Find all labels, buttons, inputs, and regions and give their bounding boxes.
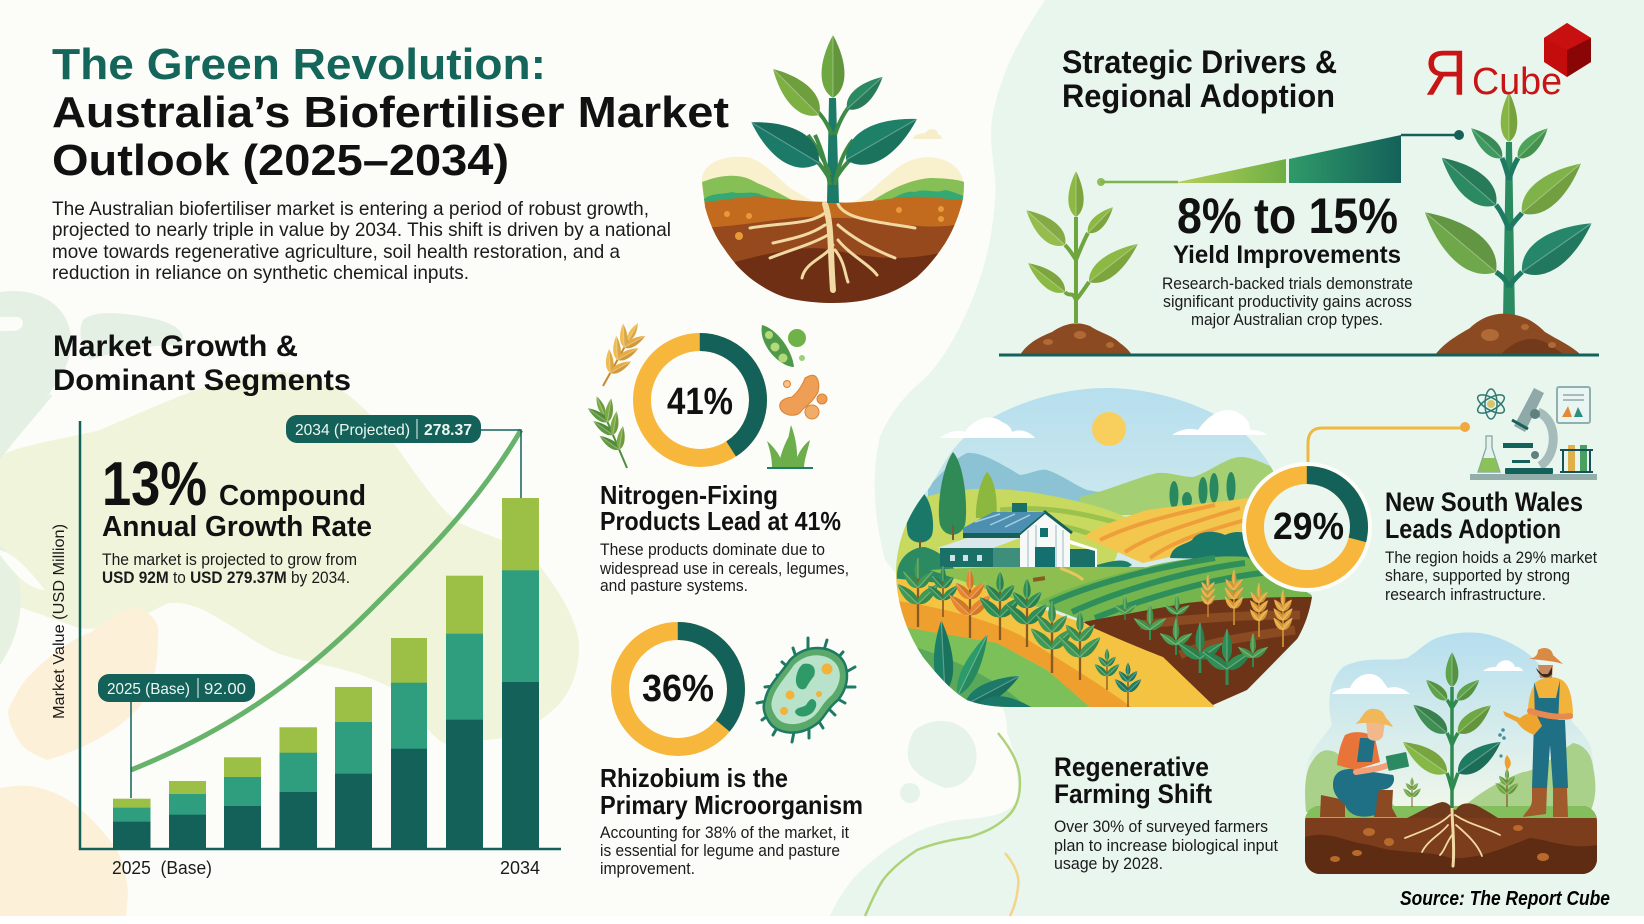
text: rhizobium: Accounting for 38% of the market, it [600, 823, 849, 842]
stat: 13% CAGR: USD 92M to USD 279.37M by 2034. [102, 568, 350, 587]
stat: yield improvements: Yield Improvements [1173, 241, 1401, 269]
intro text: move towards regenerative agriculture, soil health restoration, and a [52, 241, 620, 263]
donut: 41% nitrogen-fixing: 41% [667, 381, 733, 423]
central plant [1397, 652, 1507, 808]
stat: 13% CAGR: Annual Growth Rate [102, 511, 372, 543]
intro text: projected to nearly triple in value by 2034. This shift is driven by a national [52, 219, 671, 241]
icon: peas [762, 325, 806, 367]
text: rhizobium [600, 763, 863, 878]
logo: RCube: Cube [1472, 61, 1562, 103]
heading: market growth [53, 330, 351, 397]
text: new south wales: share, supported by strong [1385, 566, 1570, 585]
stat: yield improvements: Research-backed trials demonstrate [1162, 274, 1413, 293]
x axis labels [112, 858, 540, 878]
text: nitrogen-fixing: Products Lead at 41% [600, 506, 841, 536]
intro text [52, 198, 671, 284]
text: nitrogen-fixing: widespread use in cereals, legumes, [599, 559, 849, 578]
text: nitrogen-fixing: and pasture systems. [600, 576, 748, 595]
x axis labels: 2034 [500, 858, 540, 878]
icon: large plant [1413, 92, 1601, 355]
yellow band [890, 578, 1215, 710]
icon: peanut [780, 375, 827, 419]
donut: 36% rhizobium: 36% [642, 668, 714, 710]
illustration: farm landscape [890, 380, 1320, 720]
farmer standing [1498, 648, 1573, 817]
heading: strategic drivers [1062, 44, 1337, 114]
icon: sun [1092, 412, 1126, 446]
icon: bacterium [757, 638, 855, 742]
callout: 2025 base [98, 674, 255, 798]
donut: 36% rhizobium [620, 631, 736, 747]
source: Source: The Report Cube [1400, 888, 1610, 910]
intro text: The Australian biofertiliser market is entering a period of robust growth, [52, 198, 649, 220]
callout: 2025 base: 92.00 [204, 681, 246, 698]
y axis label: Market Value (USD Million) [51, 524, 68, 719]
logo: RCube: Я [1424, 37, 1467, 109]
text: new south wales: Leads Adoption [1385, 514, 1561, 544]
stat: 13% CAGR [102, 450, 372, 587]
callout: 2034 projected: 2034 (Projected) [295, 422, 410, 439]
donut: 29% new south wales: 29% [1273, 506, 1344, 548]
title: The Green Revolution: [52, 40, 546, 89]
stat: yield improvements: major Australian crop types. [1191, 310, 1383, 329]
text: nitrogen-fixing: Nitrogen-Fixing [600, 480, 778, 510]
bar chart: market value 2025 to 2034 [51, 415, 561, 878]
icon: plant with roots in soil [700, 35, 970, 310]
growth curve [131, 430, 521, 770]
text: regenerative farming: Regenerative [1054, 752, 1209, 782]
text: nitrogen-fixing: These products dominate due to [600, 540, 825, 559]
stat: 13% CAGR: 13% [102, 450, 207, 519]
callout: 2034 projected: 278.37 [424, 422, 472, 439]
text: new south wales: New South Wales [1385, 487, 1583, 517]
icon: research lab [1460, 387, 1597, 480]
illustration: farmers with plant [1305, 632, 1597, 874]
text: new south wales: research infrastructure. [1385, 585, 1546, 604]
green row hill [1037, 556, 1315, 622]
text: rhizobium: is essential for legume and pasture [600, 841, 840, 860]
text: regenerative farming: Farming Shift [1054, 779, 1212, 809]
green bottom-left [908, 628, 1090, 707]
callout: 2034 projected [286, 415, 521, 498]
test tubes [1560, 445, 1593, 473]
stat: yield improvements [1162, 188, 1413, 329]
microscope [1503, 388, 1553, 474]
heading: market growth: Market Growth & [53, 330, 298, 363]
heading: strategic drivers: Strategic Drivers & [1062, 44, 1337, 80]
title: Outlook (2025–2034) [52, 136, 509, 185]
text: rhizobium: improvement. [600, 859, 695, 878]
text: rhizobium: Primary Microorganism [600, 790, 863, 820]
text: regenerative farming: plan to increase biological input [1054, 836, 1278, 855]
donut: 41% nitrogen-fixing [642, 342, 758, 458]
report [1557, 387, 1590, 423]
stat: 13% CAGR: The market is projected to grow from [102, 550, 357, 569]
stacked bars [113, 498, 539, 849]
x axis labels: 2025 (Base) [112, 858, 212, 878]
trees [907, 452, 997, 552]
text: regenerative farming: Over 30% of surveyed farmers [1054, 817, 1268, 836]
icon: green grain [582, 390, 642, 474]
grass front [930, 567, 1145, 607]
text: rhizobium: Rhizobium is the [600, 763, 788, 793]
heading: market growth: Dominant Segments [53, 364, 351, 397]
bushes [897, 547, 956, 585]
crops [894, 558, 1295, 707]
dark soil field [1083, 597, 1315, 705]
title [52, 40, 729, 185]
flask [1478, 436, 1500, 472]
atom [1475, 389, 1507, 419]
icon: growth wedge [1097, 130, 1464, 186]
text: regenerative farming [1054, 752, 1278, 873]
clouds [940, 410, 1267, 438]
logo: RCube [1424, 23, 1591, 109]
connector to lab icons [1308, 428, 1465, 462]
text: new south wales [1385, 487, 1597, 604]
soil cross-section [1305, 806, 1597, 874]
callout: 2025 base: 2025 (Base) [107, 681, 190, 698]
orange strip field [1083, 498, 1248, 563]
text: regenerative farming: usage by 2028. [1054, 854, 1163, 873]
stat: yield improvements: significant productivity gains across [1163, 292, 1412, 311]
icon: wheat [589, 315, 652, 394]
text: nitrogen-fixing [599, 480, 849, 595]
stat: yield improvements: 8% to 15% [1177, 188, 1398, 244]
text: new south wales: The region hoids a 29% market [1385, 548, 1597, 567]
donut: 29% new south wales [1242, 462, 1372, 592]
intro text: reduction in reliance on synthetic chemical inputs. [52, 262, 469, 284]
stat: 13% CAGR: Compound [219, 480, 366, 512]
small seedlings [1401, 755, 1521, 807]
farmer kneeling [1320, 709, 1409, 817]
icon: grass [767, 425, 813, 469]
yield growth plants and wedge [999, 92, 1601, 355]
heading: strategic drivers: Regional Adoption [1062, 78, 1335, 114]
title: Australia’s Biofertiliser Market [52, 88, 729, 137]
icon: small plant [1020, 171, 1144, 355]
barn [937, 503, 1097, 567]
